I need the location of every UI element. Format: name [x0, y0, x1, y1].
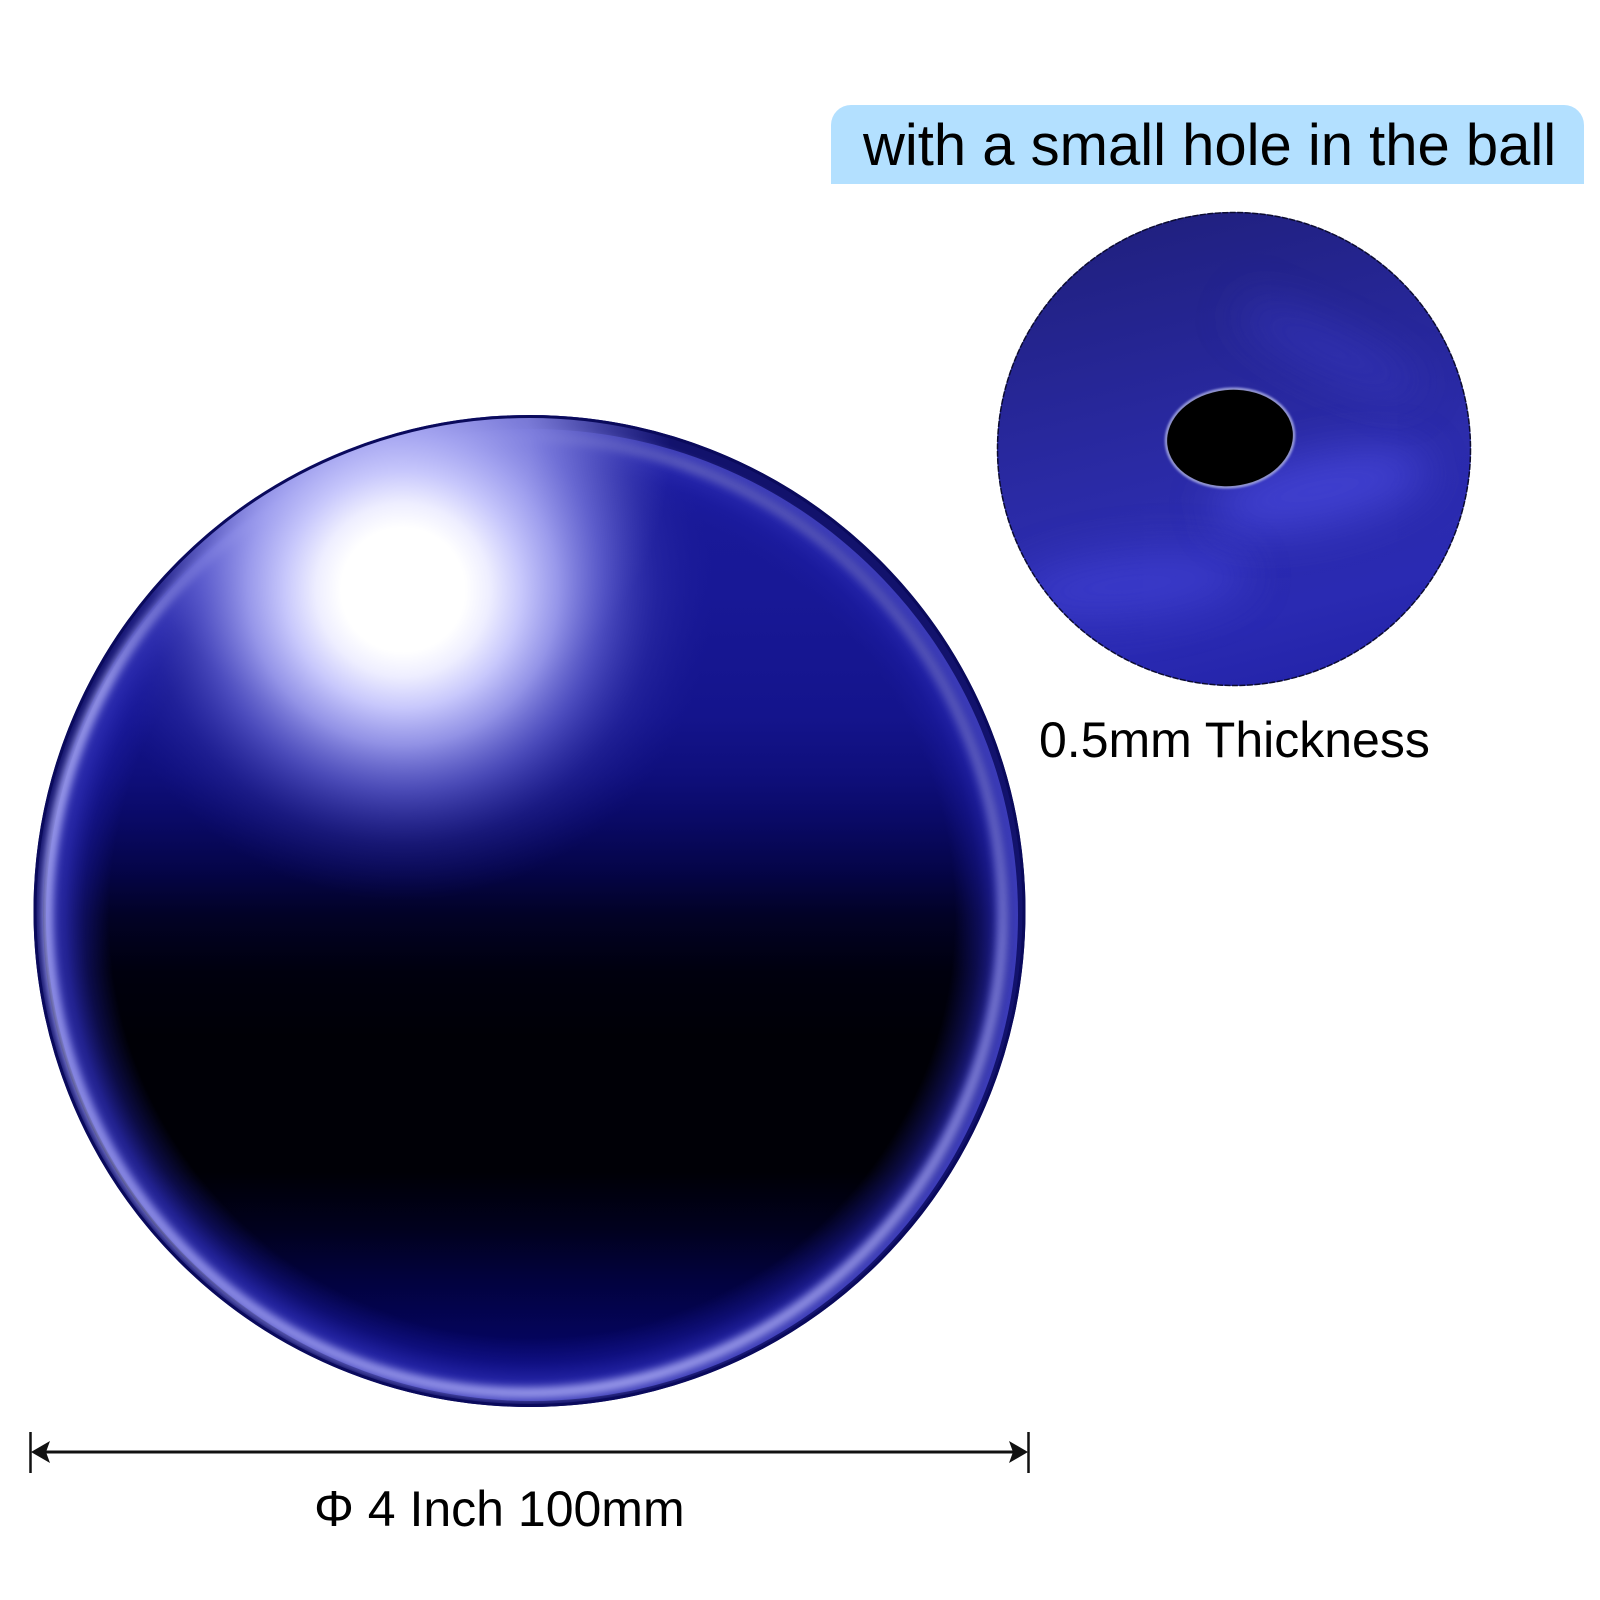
hole	[1161, 383, 1299, 493]
large blue ball	[34, 415, 1026, 1407]
diameter dimension arrow	[30, 1432, 1028, 1473]
thickness label: 0.5mm Thickness	[1039, 712, 1430, 768]
diameter label: Φ 4 Inch 100mm	[314, 1481, 685, 1537]
callout: small hole label: with a small hole in the ball	[862, 113, 1556, 178]
small disc showing the hole	[997, 212, 1471, 686]
